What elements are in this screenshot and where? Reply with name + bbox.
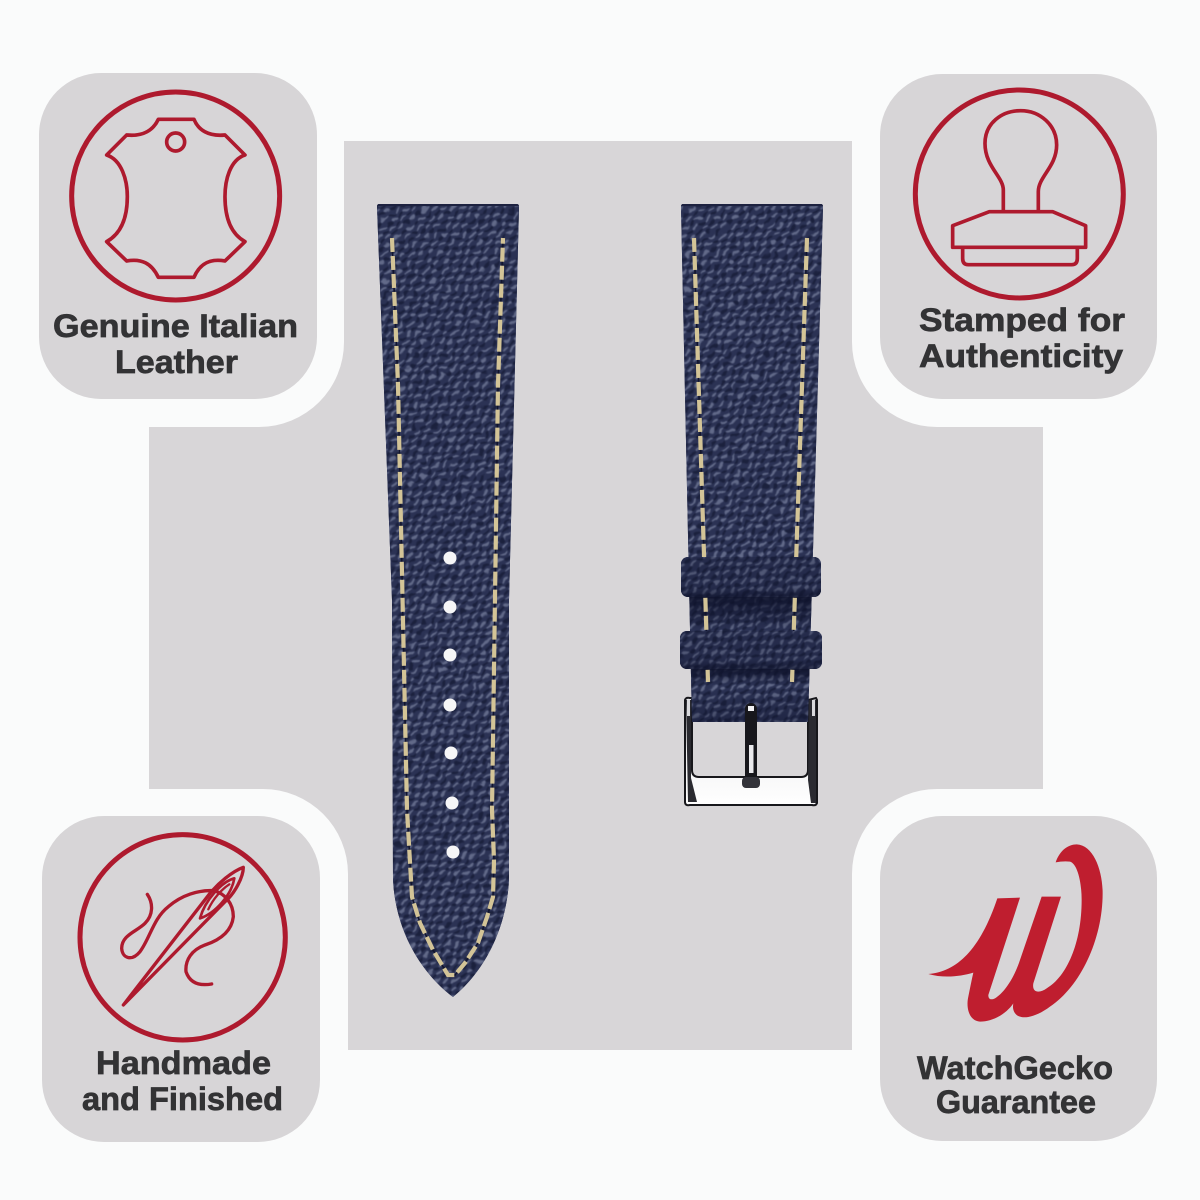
icon: ring circle [80, 835, 285, 1040]
upper keeper loop [681, 557, 821, 597]
label: watchgecko guarantee: WatchGecko [917, 1050, 1113, 1086]
grey backdrop panel [149, 141, 1043, 1050]
panel: stamped for authenticity [880, 74, 1157, 399]
label: watchgecko guarantee [917, 1050, 1113, 1120]
buckle tongue [742, 703, 760, 788]
lower keeper loop [680, 631, 822, 669]
label: genuine italian leather [53, 308, 298, 380]
panel: handmade and finished [42, 816, 320, 1142]
icon: needle and thread [122, 867, 243, 1005]
label: handmade and finished: and Finished [82, 1081, 283, 1117]
label: watchgecko guarantee: Guarantee [936, 1084, 1096, 1120]
buckle frame [685, 698, 817, 805]
buckle holes [444, 552, 460, 858]
stitching on long strap [392, 238, 503, 975]
icon: watchgecko W logo [928, 844, 1103, 1022]
label: stamped for authenticity: Stamped for [919, 302, 1125, 338]
label: handmade and finished [82, 1045, 283, 1117]
short watch strap with buckle [680, 204, 823, 806]
label: handmade and finished: Handmade [96, 1045, 271, 1081]
icon: leather hide in circle [72, 92, 280, 300]
label: stamped for authenticity: Authenticity [919, 338, 1123, 374]
label: stamped for authenticity [919, 302, 1125, 374]
label: genuine italian leather: Leather [115, 344, 238, 380]
panel: genuine italian leather [39, 73, 317, 399]
label: genuine italian leather: Genuine Italian [53, 308, 298, 344]
long watch strap piece [377, 204, 519, 997]
stitching on short strap [694, 238, 807, 682]
panel: watchgecko guarantee [880, 816, 1157, 1141]
icon: stamp in circle [915, 90, 1123, 298]
